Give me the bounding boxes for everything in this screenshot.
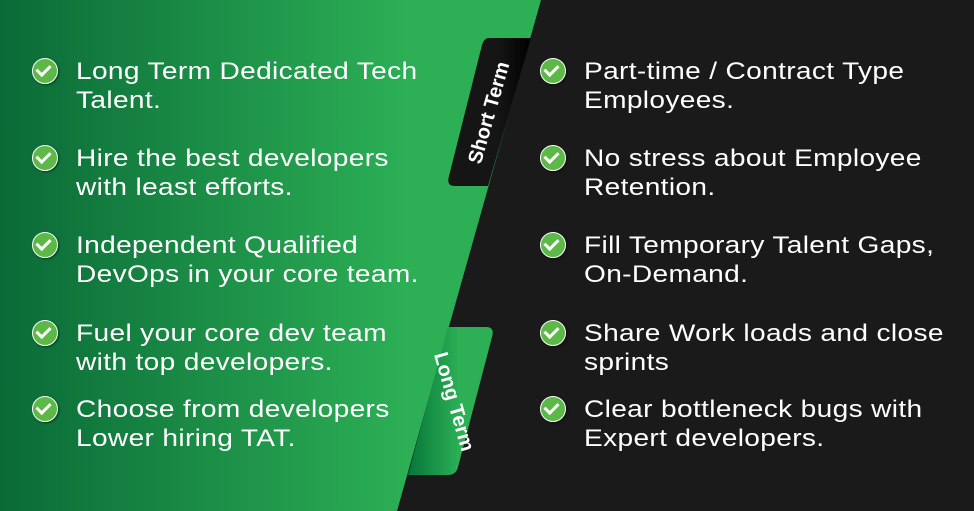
check icon [32,396,58,422]
item [76,58,417,114]
item [584,396,922,452]
item: Fill Temporary Talent Gaps, [584,232,934,259]
tab: Short Term [448,38,531,186]
item [584,145,922,201]
tab: Long Term [408,327,493,475]
check icon [32,145,58,171]
item [76,145,389,201]
item: Long Term Dedicated Tech [76,58,417,85]
item: Employees. [584,87,734,114]
item [76,396,390,452]
item [76,232,419,288]
check icon [32,320,58,346]
check icon [32,232,58,258]
check icon [540,145,566,171]
item: Lower hiring TAT. [76,425,296,452]
item: No stress about Employee [584,145,922,172]
item: Choose from developers [76,396,390,423]
item: Part-time / Contract Type [584,58,904,85]
item: Retention. [584,174,716,201]
check icon [540,232,566,258]
item: On-Demand. [584,261,748,288]
right list [540,58,944,452]
item: Share Work loads and close [584,320,944,347]
item: with least efforts. [76,174,293,201]
item: Independent Qualified [76,232,358,259]
item: Talent. [76,87,161,114]
item: Hire the best developers [76,145,389,172]
tab: Long Term: Long Term [429,350,478,454]
check icon [540,320,566,346]
item: Expert developers. [584,425,824,452]
item: Fuel your core dev team [76,320,387,347]
item: with top developers. [76,349,333,376]
check icon [540,58,566,84]
tab: Short Term: Short Term [464,59,514,166]
item [584,320,944,376]
item: DevOps in your core team. [76,261,419,288]
item [584,232,934,288]
item [584,58,904,114]
check icon [540,396,566,422]
left list [32,58,419,452]
item: Clear bottleneck bugs with [584,396,922,423]
item [76,320,387,376]
check icon [32,58,58,84]
item: sprints [584,349,669,376]
